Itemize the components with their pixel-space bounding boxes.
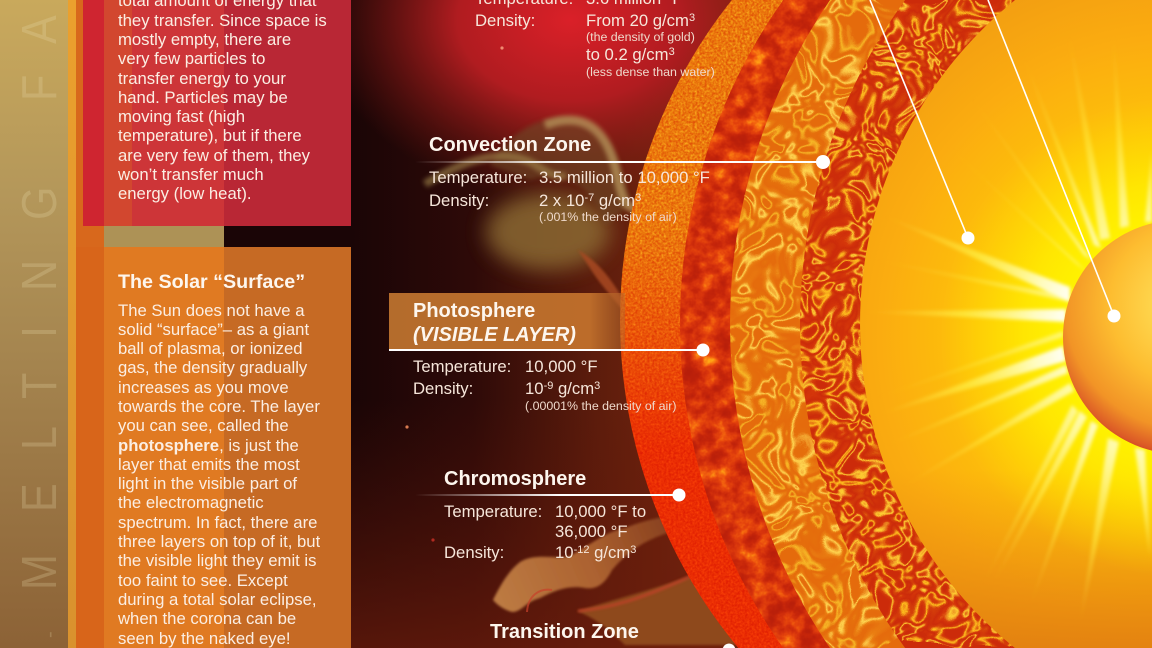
radiative density row bbox=[475, 10, 695, 30]
panel: heat explanation bbox=[83, 0, 351, 226]
vertical title text: M bbox=[11, 554, 67, 590]
convection temperature row: Temperature: bbox=[429, 168, 527, 187]
body text: heat explanation: won’t transfer much bbox=[118, 165, 264, 184]
panel: the solar surface bbox=[76, 247, 351, 648]
label: chromosphere: 10,000 °F to bbox=[555, 502, 646, 521]
photosphere temperature row bbox=[413, 357, 598, 376]
body text: heat explanation: mostly empty, there are bbox=[118, 30, 291, 49]
chromosphere density row bbox=[444, 543, 636, 562]
label: photosphere: 10-9 g/cm3 bbox=[525, 379, 600, 398]
sun illustration background bbox=[351, 0, 1152, 648]
photosphere density note: (.00001% the density of air) bbox=[525, 399, 677, 413]
convection density row bbox=[429, 191, 641, 210]
convection density row: Density: bbox=[429, 191, 489, 210]
leader line: photosphere bbox=[389, 344, 710, 356]
vertical title text: F bbox=[11, 75, 67, 101]
body text: heat explanation: are very few of them, they bbox=[118, 146, 310, 165]
convection density note: (.001% the density of air) bbox=[539, 210, 677, 224]
solar layer: outer granular ring bbox=[620, 0, 784, 648]
label: transition zone: Transition Zone bbox=[490, 621, 639, 643]
body text: the solar surface: photosphere, is just the bbox=[118, 436, 299, 455]
body text: the solar surface: three layers on top of it, but bbox=[118, 532, 320, 551]
body text: heat explanation: hand. Particles may be bbox=[118, 88, 288, 107]
leader line: core bbox=[988, 0, 1120, 322]
upper solar prominence bbox=[425, 118, 642, 325]
radiative density note: gold: (the density of gold) bbox=[586, 30, 695, 44]
body text: heat explanation: transfer energy to your bbox=[118, 69, 286, 88]
radiative density row: Density: bbox=[475, 10, 535, 30]
vertical title text: - bbox=[39, 631, 61, 638]
body text: the solar surface: The Sun does not have a bbox=[118, 300, 304, 320]
convection temperature row bbox=[429, 168, 710, 187]
body text: the solar surface: increases as you move bbox=[118, 378, 289, 397]
radiative zone disc bbox=[860, 0, 1152, 648]
leader line: convection zone bbox=[415, 155, 830, 169]
body text: the solar surface: light in the visible part of bbox=[118, 474, 297, 493]
leader dot: transition zone bbox=[723, 643, 735, 648]
body text: heat explanation: very few particles to bbox=[118, 49, 265, 68]
photosphere density row: Density: bbox=[413, 379, 473, 398]
label: chromosphere: 36,000 °F bbox=[555, 522, 628, 541]
chromosphere temperature row: Temperature: bbox=[444, 502, 542, 521]
body text: heat explanation: energy (low heat). bbox=[118, 184, 252, 203]
label: convection zone bbox=[429, 134, 710, 224]
body text: the solar surface: during a total solar eclipse, bbox=[118, 590, 317, 609]
vertical title text: T bbox=[11, 373, 67, 399]
label: photosphere: 10,000 °F bbox=[525, 357, 598, 376]
body text: heat explanation: they transfer. Since space is bbox=[118, 11, 327, 30]
body text: the solar surface: gas, the density gradually bbox=[118, 358, 307, 377]
leader line: chromosphere bbox=[415, 488, 686, 502]
body text: the solar surface: layer that emits the most bbox=[118, 455, 300, 474]
left vertical title band bbox=[0, 0, 68, 648]
leader line: radiative zone bbox=[870, 0, 974, 244]
vertical title text: L bbox=[11, 426, 67, 450]
photosphere temperature row: Temperature: bbox=[413, 357, 511, 376]
body text: the solar surface: solid “surface”– as a giant bbox=[118, 320, 309, 339]
solar layer: red and yellow turbulent band bbox=[800, 0, 1015, 648]
radiative temperature row bbox=[475, 0, 683, 8]
body text: the solar surface: seen by the naked eye! bbox=[118, 629, 291, 648]
label: chromosphere bbox=[444, 468, 646, 562]
body text: heat explanation: moving fast (high bbox=[118, 107, 245, 126]
body text: the solar surface: when the corona can be bbox=[118, 609, 296, 628]
vertical title text: N bbox=[11, 260, 67, 291]
chromosphere heading: Chromosphere bbox=[444, 468, 586, 490]
vertical title text: E bbox=[11, 483, 67, 512]
label: convection zone: 3.5 million to 10,000 °F bbox=[539, 168, 710, 187]
label: radiative zone data bbox=[475, 0, 715, 78]
label: chromosphere: 10-12 g/cm3 bbox=[555, 543, 636, 562]
light rays bbox=[904, 88, 1152, 592]
heading: the solar surface: The Solar “Surface” bbox=[118, 271, 305, 293]
body text: the solar surface: ball of plasma, or ionized bbox=[118, 339, 303, 358]
photosphere density row bbox=[413, 379, 600, 398]
radiative density note: water: (less dense than water) bbox=[586, 64, 715, 78]
label: convection zone: 2 x 10-7 g/cm3 bbox=[539, 191, 641, 210]
accent stripe bbox=[68, 0, 76, 648]
photosphere heading: Photosphere bbox=[413, 300, 535, 322]
photosphere banner bbox=[389, 293, 625, 350]
body text: the solar surface: the visible light they emit is bbox=[118, 551, 316, 570]
body text: heat explanation bbox=[118, 0, 327, 203]
vertical title text: A bbox=[11, 15, 67, 44]
radiative density value: low end: to 0.2 g/cm3 bbox=[586, 44, 675, 64]
convection heading: Convection Zone bbox=[429, 134, 591, 156]
label: radiative zone data: From 20 g/cm3 bbox=[586, 10, 695, 30]
solar layer: light swirling band bbox=[730, 0, 905, 648]
body text: the solar surface: spectrum. In fact, there are bbox=[118, 513, 317, 532]
chromosphere temperature row bbox=[444, 502, 646, 541]
label: photosphere bbox=[413, 300, 677, 413]
vertical title text bbox=[11, 15, 67, 638]
body text: the solar surface: towards the core. The layer bbox=[118, 397, 320, 416]
gold connector block bbox=[104, 226, 224, 247]
body text: the solar surface: too faint to see. Except bbox=[118, 571, 288, 590]
chromosphere density row: Density: bbox=[444, 543, 504, 562]
vertical title text: I bbox=[11, 326, 67, 338]
body text: the solar surface: you can see, called the bbox=[118, 416, 289, 435]
vertical title text: G bbox=[11, 186, 67, 220]
body text: the solar surface: the electromagnetic bbox=[118, 493, 264, 512]
body text: the solar surface bbox=[118, 300, 320, 648]
orange stripe bbox=[76, 0, 104, 648]
body text: heat explanation: temperature), but if there bbox=[118, 126, 302, 145]
photosphere subheading: (VISIBLE LAYER) bbox=[413, 324, 576, 346]
solar core sphere bbox=[1063, 220, 1152, 454]
lower solar prominence bbox=[493, 516, 745, 645]
solar layer: dark red band bbox=[680, 0, 830, 648]
